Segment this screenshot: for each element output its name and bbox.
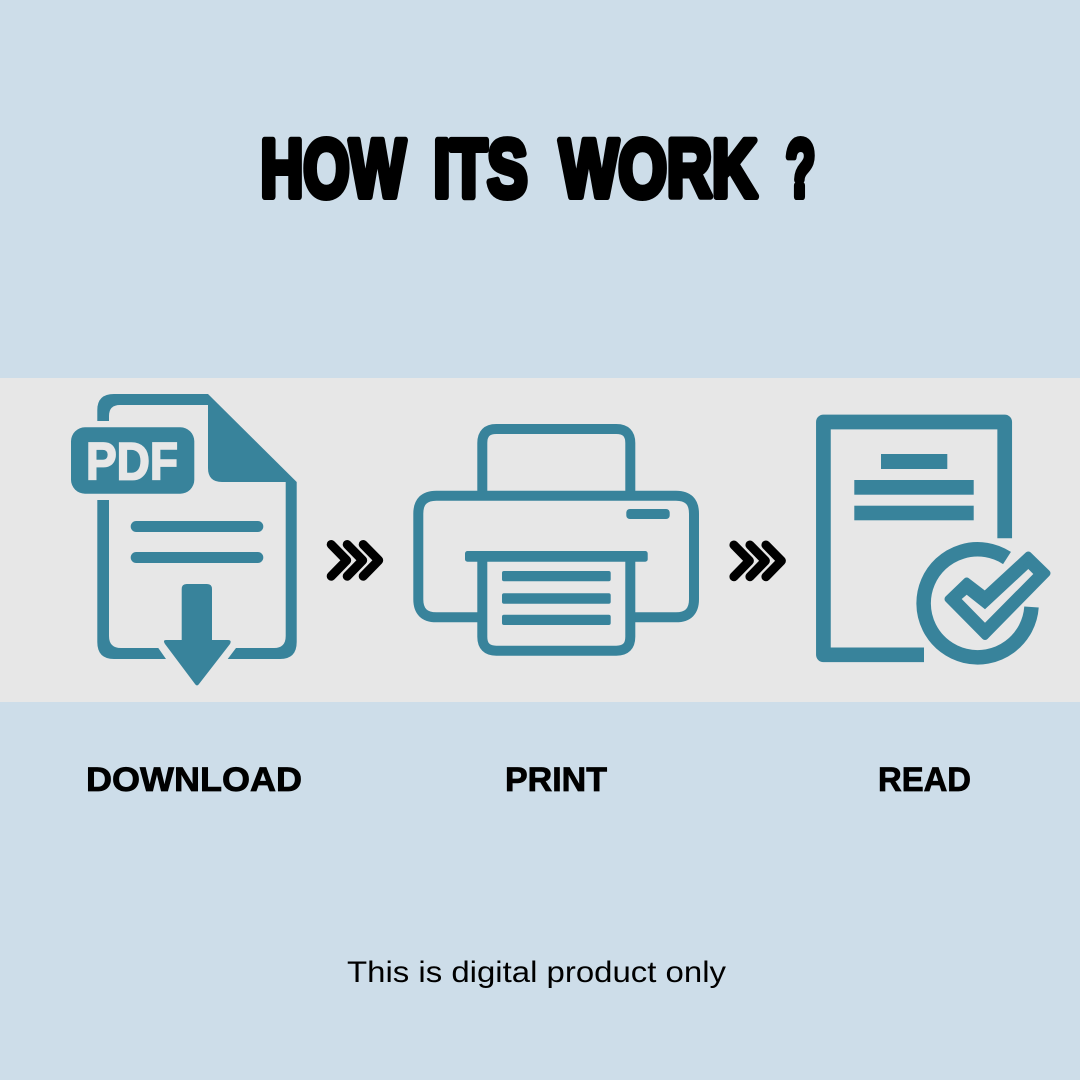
icon: document with check [823,422,1047,657]
icon: printer [418,429,694,651]
footer note: This is digital product only [347,956,726,989]
title: ITS [434,124,528,214]
arrow: print to read [734,545,781,577]
title [260,124,816,214]
label: read: READ [878,761,971,799]
title: ? [786,124,816,214]
title: WORK [560,124,757,214]
label: download: DOWNLOAD [86,761,302,799]
icon: PDF download [71,394,297,686]
arrow: download to print [331,544,379,576]
label: print: PRINT [505,761,607,799]
document lines [131,521,263,563]
download arrow [164,584,231,686]
grey band [0,378,1080,702]
title: HOW [260,124,406,214]
PDF badge: PDF [86,432,178,492]
